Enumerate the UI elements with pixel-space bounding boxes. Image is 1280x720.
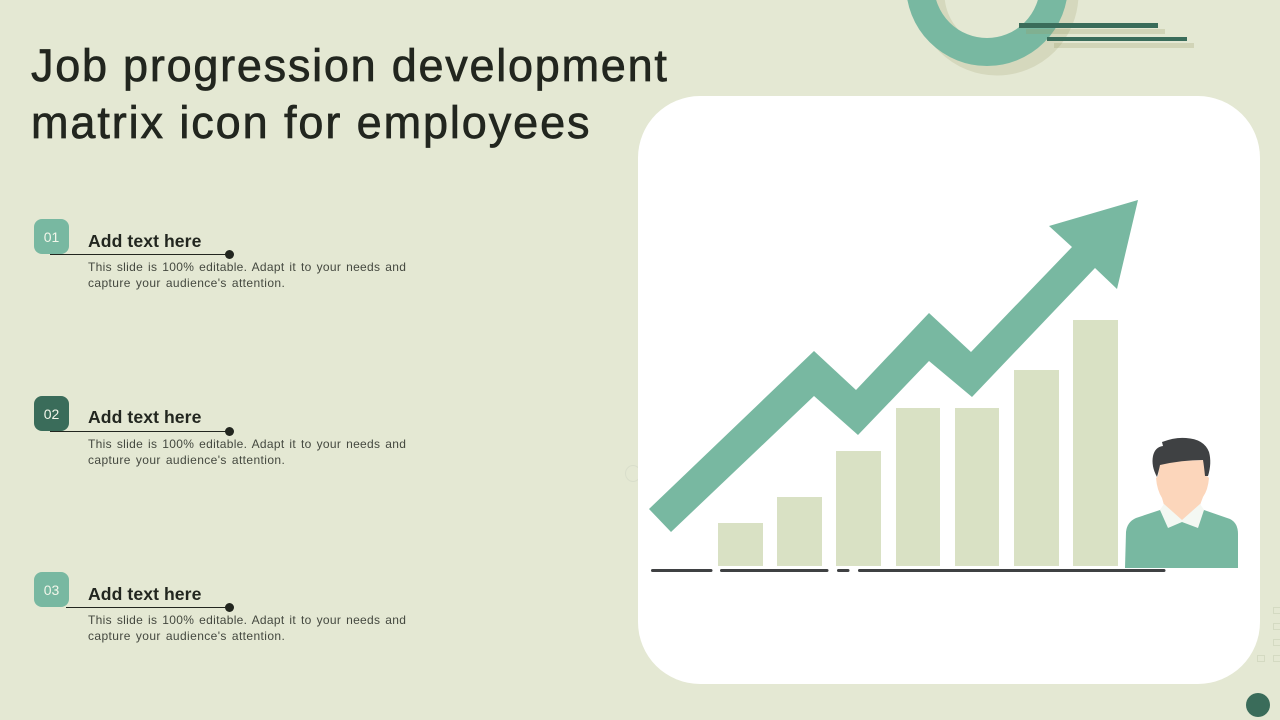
panel: white chart card <box>638 96 1260 684</box>
description 01: capture your audience's attention. <box>88 276 285 290</box>
item 03 <box>88 584 406 643</box>
badge 03 <box>34 572 69 607</box>
badge 01 <box>34 219 69 254</box>
title: Job progression development <box>31 40 669 91</box>
title <box>31 40 669 148</box>
item 02 <box>88 407 406 467</box>
collar <box>1160 504 1204 528</box>
baseline segments <box>652 569 1164 572</box>
badge 03: 03 <box>44 582 59 598</box>
connector line 03 <box>66 603 234 612</box>
description 02: This slide is 100% editable. Adapt it to your needs and <box>88 437 406 451</box>
description 01: This slide is 100% editable. Adapt it to your needs and <box>88 260 406 274</box>
face and neck <box>1156 460 1209 521</box>
description 02 <box>88 437 406 467</box>
arrow: rising trend <box>649 200 1138 532</box>
badge 02 <box>34 396 69 431</box>
description 02: capture your audience's attention. <box>88 453 285 467</box>
faint circle outline <box>625 465 641 482</box>
heading 03: Add text here <box>88 584 201 604</box>
item 01 <box>88 231 406 290</box>
title: matrix icon for employees <box>31 97 591 148</box>
badge 01: 01 <box>44 229 59 245</box>
sweater <box>1125 510 1238 568</box>
faint grid of squares <box>1257 607 1280 662</box>
hair <box>1152 438 1210 477</box>
description 03 <box>88 613 406 643</box>
description 03: capture your audience's attention. <box>88 629 285 643</box>
connector line 01 <box>50 250 234 259</box>
description 03: This slide is 100% editable. Adapt it to your needs and <box>88 613 406 627</box>
decorative dark dot <box>1246 693 1270 717</box>
icon: employee <box>1125 438 1238 568</box>
bar chart <box>718 320 1118 566</box>
heading 01: Add text here <box>88 231 201 251</box>
badge 02: 02 <box>44 406 59 422</box>
description 01 <box>88 260 406 290</box>
connector line 02 <box>50 427 234 436</box>
heading 02: Add text here <box>88 407 201 427</box>
